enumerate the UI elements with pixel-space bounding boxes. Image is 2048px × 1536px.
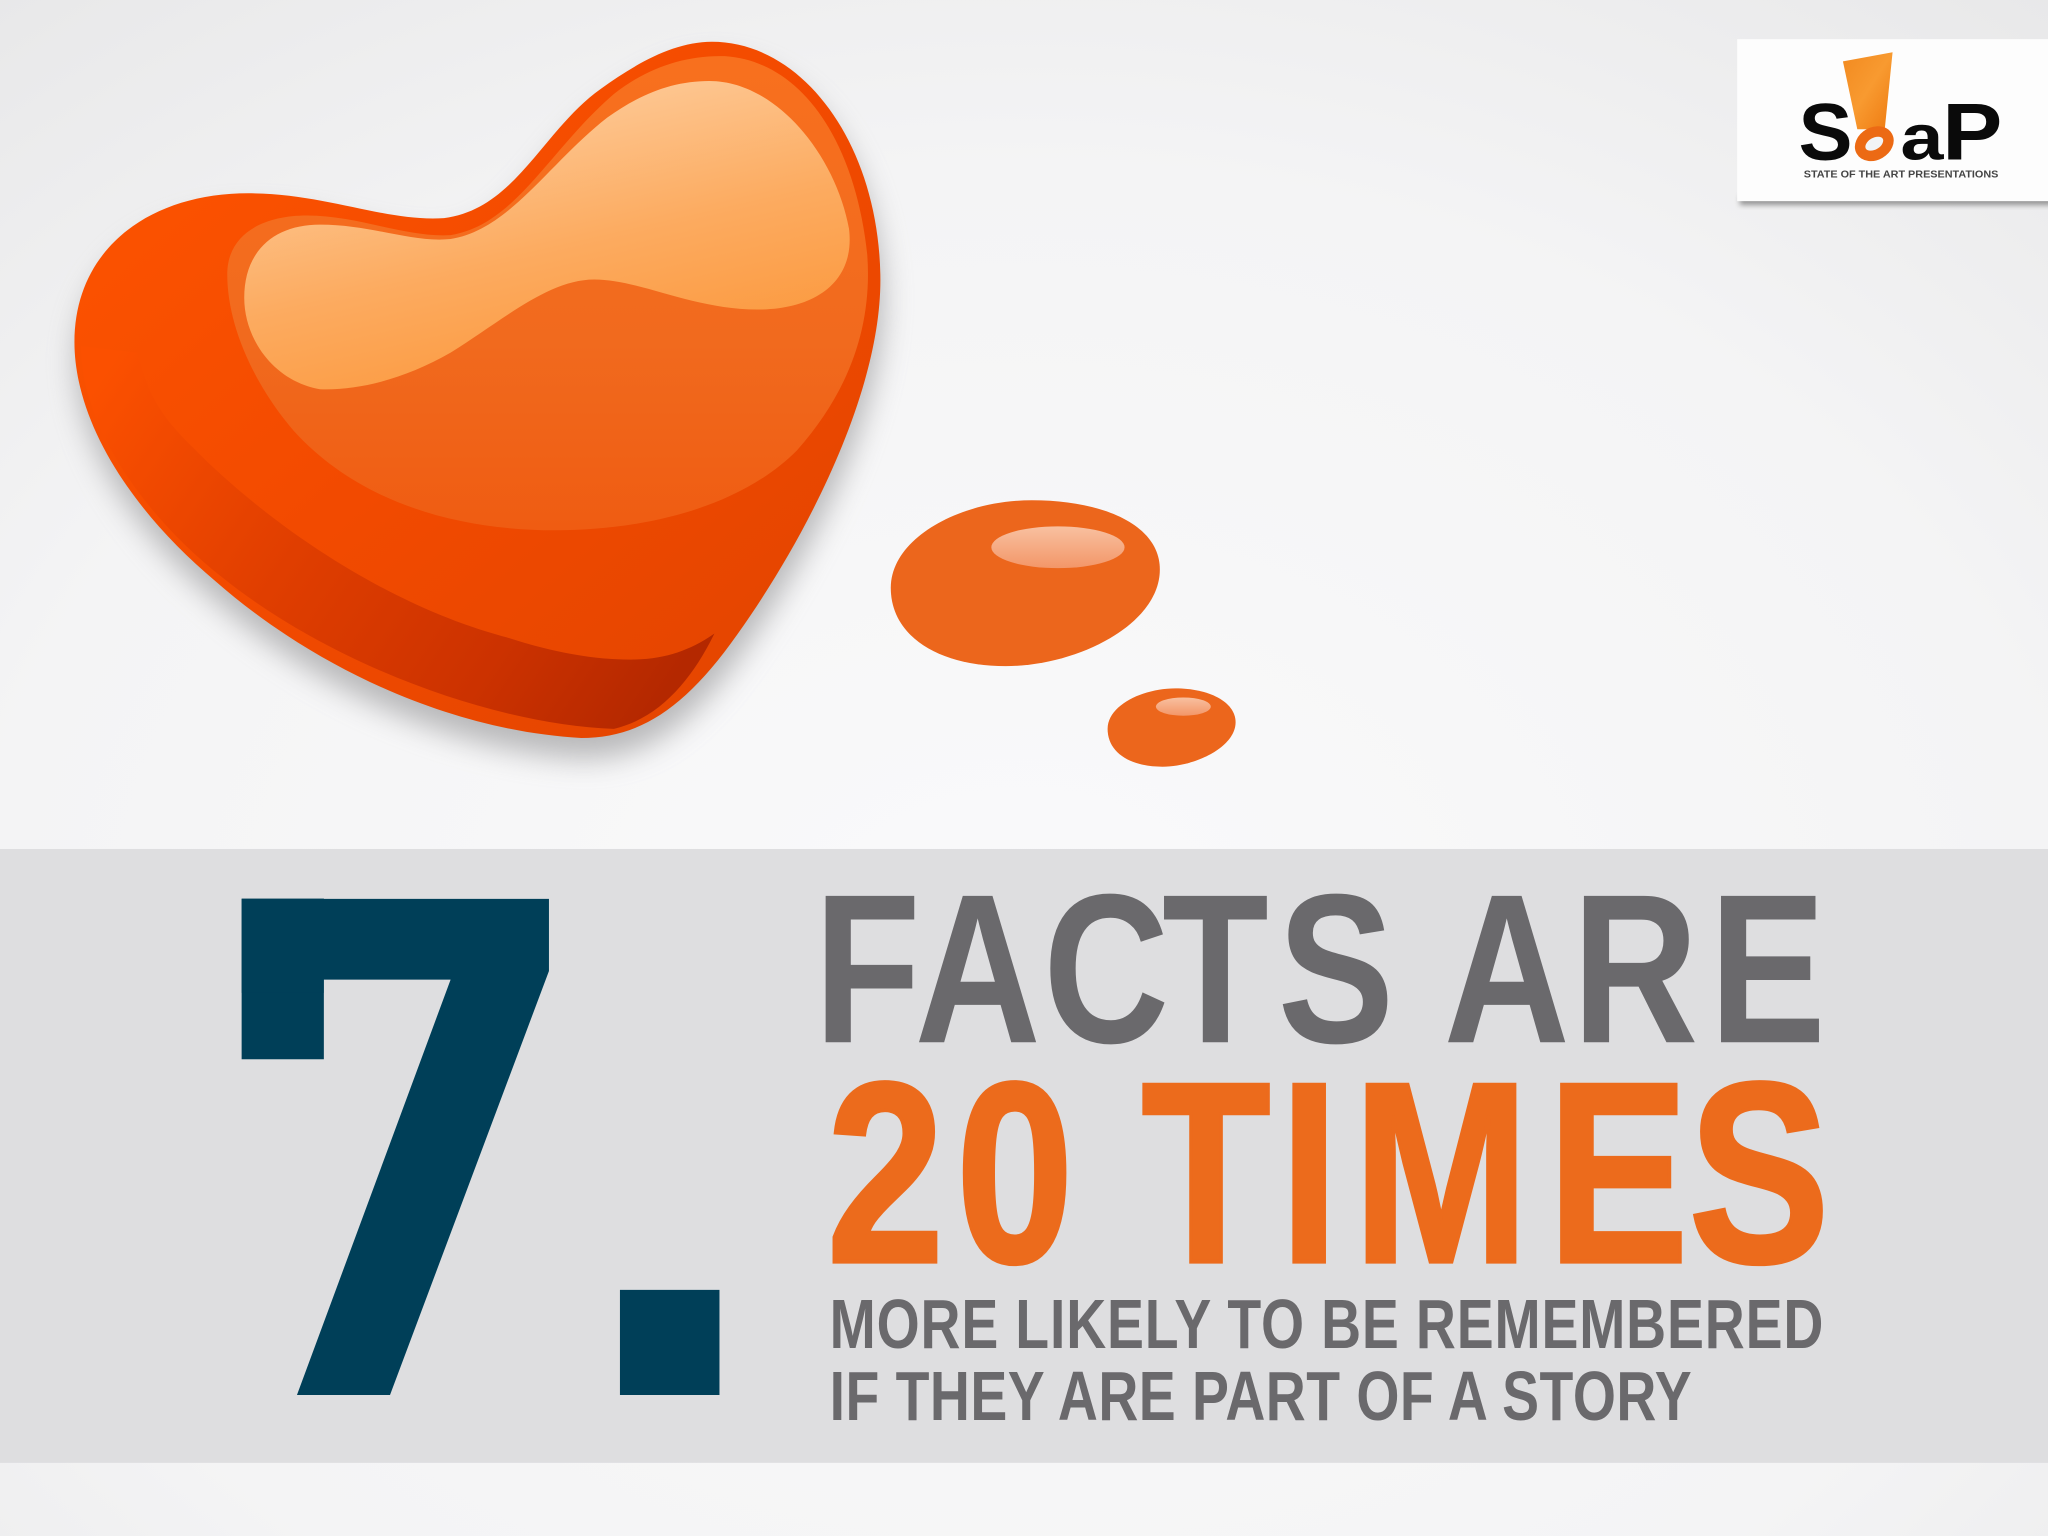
heart middle lobe <box>227 56 868 530</box>
logo wordmark o <box>1856 127 1893 161</box>
logo exclamation mark <box>1843 52 1893 129</box>
logo wordmark P: P <box>1942 87 2002 177</box>
heart dark lower band <box>81 346 714 729</box>
logo card <box>1737 39 2048 205</box>
heart base <box>74 42 880 738</box>
period: . <box>572 758 768 1536</box>
numeral counter trim <box>255 980 451 1396</box>
large droplet highlight <box>991 526 1125 568</box>
subtext line 2: IF THEY ARE PART OF A STORY <box>830 1358 1692 1435</box>
heart illustration <box>74 42 883 759</box>
heart shadow <box>77 63 883 759</box>
large thought droplet <box>891 500 1160 666</box>
numeral serif <box>242 899 324 1059</box>
small droplet highlight <box>1156 697 1211 716</box>
lower banner panel <box>0 849 2048 1463</box>
headline: facts are: FACTS ARE <box>814 851 1826 1088</box>
headline: 20 times: 20 TIMES <box>827 1029 1830 1316</box>
logo wordmark a: a <box>1900 101 1944 173</box>
small thought droplet <box>1108 688 1236 767</box>
logo wordmark S: S <box>1799 87 1853 177</box>
numeral 7: 7 <box>204 763 593 1536</box>
logo card panel <box>1737 39 2048 201</box>
big number seven with period <box>204 758 768 1536</box>
logo card shadow <box>1740 196 2048 205</box>
heart glossy highlight <box>244 81 850 389</box>
subtext line 1: MORE LIKELY TO BE REMEMBERED <box>830 1286 1823 1363</box>
logo tagline: STATE OF THE ART PRESENTATIONS <box>1804 170 1999 181</box>
